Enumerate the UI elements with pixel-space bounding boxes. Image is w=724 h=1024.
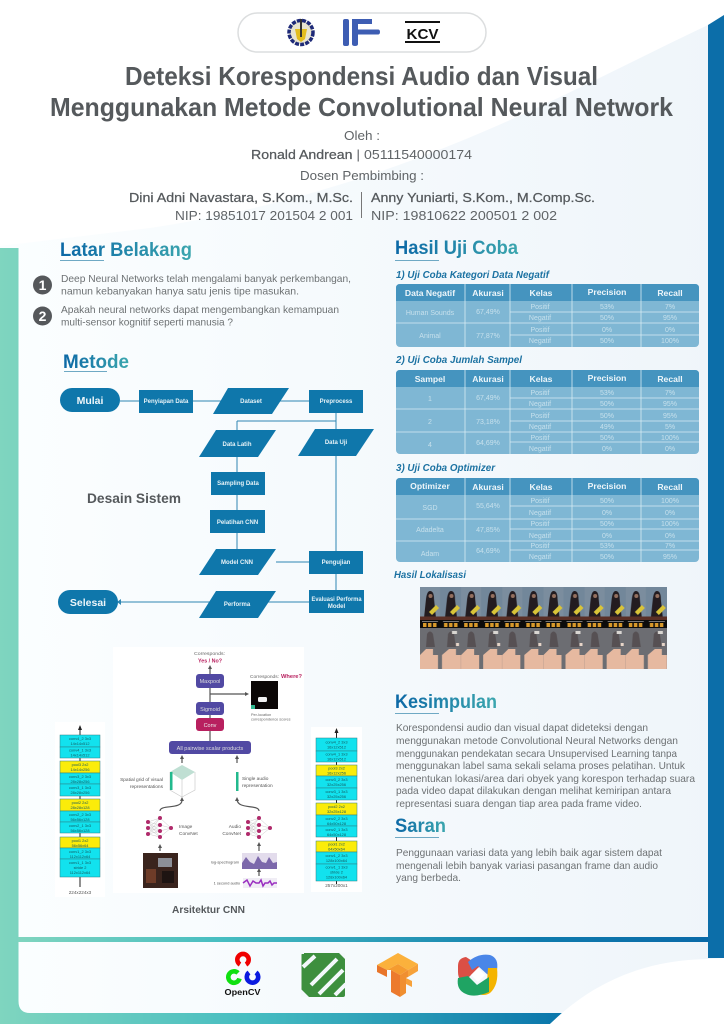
authors and supervisors: Oleh : (344, 128, 380, 143)
right VGG stack: 257x200x1 (325, 883, 348, 888)
paragraph: mengenali lebih banyak variasi pasangan frame dan audio (396, 861, 658, 872)
authors and supervisors: Dini Adni Navastara, S.Kom., M.Sc. (129, 190, 353, 205)
left VGG stack: 56x56x64 (72, 843, 89, 848)
right VGG stack: 16x12x512 (327, 756, 346, 762)
subheading 2: 2) Uji Coba Jumlah Sampel (395, 355, 522, 366)
paragraph: representasi suara dengan tiap area pada frame video. (396, 799, 642, 810)
table 1: Animal (419, 333, 441, 340)
table 2: 2 (428, 419, 432, 426)
table 2: 1 (428, 396, 432, 403)
audio convnet: ConvNet (222, 831, 242, 837)
table 1: Kelas (530, 288, 553, 298)
left VGG stack: conv2_2 3x3 (69, 812, 91, 817)
table 1 (396, 284, 699, 347)
table 3: Negatif (529, 554, 551, 561)
icon: TensorFlow (377, 953, 418, 997)
left VGG stack: 28x28x256 (70, 779, 90, 784)
Sigmoid (196, 702, 224, 715)
table 2 (396, 370, 699, 454)
table 1: 67,49% (476, 309, 500, 316)
table 1: 100% (661, 338, 679, 345)
left VGG stack: 14x14x512 (70, 752, 90, 758)
node: Evaluasi Performa Model: Evaluasi Performa (312, 597, 362, 603)
table 2: Positif (530, 390, 550, 397)
node: Evaluasi Performa Model (309, 590, 364, 613)
right VGG stack: conv4_2 3x3 (325, 740, 348, 744)
Maxpool: Maxpool (200, 679, 220, 685)
table 3: 50% (600, 554, 614, 561)
table 1: Negatif (529, 315, 551, 322)
node: Preprocess: Preprocess (320, 399, 353, 405)
node: Sampling Data: Sampling Data (217, 481, 259, 487)
icon: FFmpeg (300, 952, 346, 997)
table 2: Negatif (529, 446, 551, 453)
node: Sampling Data (211, 472, 265, 495)
table 1: 0% (602, 327, 612, 334)
visual representation cube (120, 765, 195, 797)
arrowhead to Selesai (117, 599, 121, 605)
right VGG stack: 16x12x512 (327, 744, 346, 750)
table 2: Negatif (529, 401, 551, 408)
table 2: 5% (665, 424, 675, 431)
table 2: 95% (663, 413, 677, 420)
logo pill (238, 13, 486, 52)
node: Penyiapan Data (139, 390, 193, 413)
left VGG stack: 112x112x64 (70, 870, 91, 875)
icon: OpenCV (224, 954, 261, 997)
left VGG stack: 14x14x512 (70, 741, 90, 746)
correspondence map: correspondence scores (251, 718, 291, 722)
right VGG stack: 64x50x128 (327, 832, 346, 837)
table 2: 64,69% (476, 440, 500, 447)
table 3: Precision (588, 481, 626, 491)
right VGG stack: 64x50x64 (328, 846, 346, 852)
correspondence map (250, 674, 302, 722)
node: Performa (199, 591, 276, 618)
table 3: 0% (602, 533, 612, 540)
point 1: Deep Neural Networks telah mengalami banyak perkembangan, (61, 274, 351, 285)
table 1: 7% (665, 304, 675, 311)
point 1 (33, 274, 351, 298)
All pairwise scalar products (169, 741, 251, 754)
table 1: Precision (588, 287, 626, 297)
left VGG stack: conv1_1 3x3 (69, 860, 91, 865)
paragraph: pada video dapat dilakukan dengan melihat kemiripan antara (396, 786, 671, 797)
right VGG stack: conv3_1 3x3 (325, 789, 348, 794)
correspondence map: Per-location (251, 713, 271, 717)
left VGG stack: 28x28x128 (70, 805, 90, 810)
node: Mulai (60, 388, 120, 412)
audio waveform (214, 878, 277, 888)
audio convnet (222, 816, 272, 839)
table 3: 0% (602, 510, 612, 517)
table 3: 0% (665, 510, 675, 517)
left VGG stack: pool3 2x2 (72, 762, 88, 767)
paragraph: Penggunaan variasi data yang lebih baik agar sistem dapat (396, 848, 662, 859)
table 2: Akurasi (472, 374, 504, 384)
left VGG stack: 56x56x128 (70, 817, 90, 822)
authors and supervisors: NIP: 19851017 201504 2 001 (175, 208, 353, 223)
table 3 (396, 478, 699, 562)
node: Penyiapan Data: Penyiapan Data (144, 399, 189, 405)
right VGG stack: conv2_2 3x3 (325, 816, 348, 821)
icon: ITS emblem (289, 19, 313, 44)
heading: Hasil Uji Coba (395, 238, 518, 259)
left VGG stack: conv3_2 3x3 (69, 774, 91, 779)
panel: Kesimpulan (395, 692, 695, 810)
heading: Kesimpulan (395, 692, 497, 713)
output label: Yes / No? (198, 658, 222, 664)
table 3: 55,64% (476, 503, 500, 510)
table 2: 53% (600, 390, 614, 397)
table 1: 50% (600, 338, 614, 345)
panel: Hasil Uji Coba (394, 238, 699, 669)
right VGG stack: 32x25x256 (327, 782, 346, 787)
table 3: Adadelta (416, 527, 444, 534)
table 2: 95% (663, 401, 677, 408)
log-spectrogram: log-spectrogram (211, 860, 239, 864)
heading: Saran (395, 816, 446, 837)
visual representation cube: Spatial grid of visual (120, 777, 163, 783)
table 2: Positif (530, 413, 550, 420)
audio representation bar: Single audio (242, 776, 269, 782)
table 2: Negatif (529, 424, 551, 431)
table 3: 0% (665, 533, 675, 540)
right VGG stack: conv1_2 3x3 (325, 853, 348, 858)
table 3: 47,85% (476, 527, 500, 534)
right VGG stack (311, 727, 362, 892)
audio representation bar (236, 772, 273, 791)
output label: Corresponds: (194, 651, 225, 656)
left VGG stack: 112x112x64 (70, 854, 91, 859)
Sigmoid: Sigmoid (200, 707, 220, 713)
table 3: Optimizer (410, 481, 450, 491)
right VGG stack: conv3_2 3x3 (325, 777, 348, 782)
table 1: Positif (530, 327, 550, 334)
table 3: 53% (600, 543, 614, 550)
node: Pengujian: Pengujian (322, 560, 351, 566)
paragraph: Korespondensi audio dan visual dapat dideteksi dengan (396, 723, 648, 734)
node: Selesai (58, 590, 118, 614)
right VGG stack: stride 2 (330, 870, 343, 874)
table 2: 100% (661, 435, 679, 442)
left VGG stack: pool2 2x2 (72, 800, 88, 805)
table 1: 53% (600, 304, 614, 311)
left VGG stack: 28x28x256 (70, 790, 90, 795)
audio representation bar: representation (242, 783, 273, 789)
table 1: Positif (530, 304, 550, 311)
right VGG stack: 32x25x128 (327, 809, 346, 814)
point 1: 1 (39, 277, 47, 293)
icon: KCV logo: KCV (406, 26, 438, 43)
node: Performa: Performa (224, 602, 251, 608)
table 3: Recall (657, 482, 683, 492)
paragraph (396, 723, 695, 810)
image convnet: ConvNet (179, 831, 198, 837)
Conv: Conv (204, 723, 217, 729)
table 3: Adam (421, 551, 439, 558)
node: Pengujian (309, 551, 363, 574)
table 2: 50% (600, 401, 614, 408)
authors and supervisors: Ronald Andrean | 05111540000174 (251, 147, 472, 162)
right VGG stack: 32x25x256 (327, 794, 346, 799)
table 3: Positif (530, 521, 550, 528)
node: Data Latih: Data Latih (222, 442, 252, 448)
heading: Latar Belakang (60, 240, 192, 261)
visual representation cube: representations (130, 784, 164, 790)
table 1: Negatif (529, 338, 551, 345)
right VGG stack: 128x100x64 (326, 874, 348, 880)
left VGG stack: conv1_2 3x3 (69, 849, 91, 854)
node: Preprocess (309, 390, 363, 413)
table 3: SGD (422, 505, 438, 512)
left VGG stack: stride 2 (74, 865, 86, 870)
node: Dataset: Dataset (240, 399, 262, 405)
node: Pelatihan CNN: Pelatihan CNN (217, 520, 258, 526)
subheading: Hasil Lokalisasi: Hasil Lokalisasi (394, 570, 466, 581)
left VGG stack (55, 722, 105, 897)
output label (194, 651, 225, 664)
left VGG stack: conv4_1 3x3 (69, 748, 91, 752)
table 1: 0% (665, 327, 675, 334)
localisation result frames (420, 587, 667, 669)
table 2: 50% (600, 435, 614, 442)
paragraph: menentukan lokasi/area dari obyek yang korespon terhadap suara (396, 774, 695, 785)
node: Pelatihan CNN (210, 510, 265, 533)
right VGG stack: 128x100x64 (326, 858, 348, 863)
node: Data Uji: Data Uji (325, 440, 348, 446)
table 1: 95% (663, 315, 677, 322)
node: Model CNN: Model CNN (221, 560, 253, 566)
table 2: 0% (665, 446, 675, 453)
image convnet: Image (179, 824, 193, 830)
right VGG stack: pool1 2x2 (328, 842, 345, 846)
table 3: 7% (665, 543, 675, 550)
icon: OpenCV: OpenCV (224, 987, 261, 997)
left VGG stack: conv4_2 3x3 (69, 736, 91, 741)
title: Deteksi Korespondensi Audio dan Visual (125, 61, 598, 91)
table 2: Positif (530, 435, 550, 442)
left VGG stack: 224x224x3 (69, 890, 92, 895)
heading: Metode: Metode (63, 352, 129, 373)
flowchart: Desain Sistem (58, 388, 374, 618)
table 3: Kelas (530, 482, 553, 492)
table 2: 73,18% (476, 419, 500, 426)
panel: Latar Belakang (33, 240, 351, 328)
node: Mulai: Mulai (77, 395, 103, 407)
right VGG stack: conv1_1 3x3 (325, 864, 348, 870)
table 1: Akurasi (472, 288, 504, 298)
paragraph: yang berbeda. (396, 873, 461, 884)
table 3: Negatif (529, 533, 551, 540)
table 1: 50% (600, 315, 614, 322)
icon: KCV logo (405, 21, 440, 43)
right VGG stack: 64x50x128 (327, 821, 346, 826)
footer logos (224, 952, 497, 997)
table 2: 0% (602, 446, 612, 453)
node: Evaluasi Performa Model: Model (328, 604, 345, 610)
table 3: 100% (661, 498, 679, 505)
table 3: 50% (600, 521, 614, 528)
paragraph: menggunakan metode Convolutional Neural Networks dengan (396, 736, 678, 747)
left VGG stack: conv3_1 3x3 (69, 785, 91, 790)
audio waveform: 1 second audio (214, 880, 240, 886)
left VGG stack: 56x56x128 (70, 828, 90, 833)
point 2 (33, 305, 339, 328)
title (50, 61, 674, 122)
table 1: 77,87% (476, 333, 500, 340)
table 2: Recall (657, 374, 683, 384)
paragraph (396, 848, 662, 884)
Maxpool (196, 674, 224, 688)
table 2: 4 (428, 442, 432, 449)
table 2: Precision (588, 373, 626, 383)
image convnet (146, 816, 198, 839)
table 2: Kelas (530, 374, 553, 384)
audio convnet: Audio (229, 824, 241, 830)
table 3: Positif (530, 543, 550, 550)
center diagram (113, 647, 304, 893)
left VGG stack: 14x14x256 (70, 767, 90, 772)
left VGG stack: conv2_1 3x3 (69, 823, 91, 828)
table 3: 50% (600, 498, 614, 505)
node: Dataset (213, 388, 289, 414)
table 3: 95% (663, 554, 677, 561)
correspondence map: Where? (281, 674, 302, 680)
input video frame (143, 853, 178, 888)
table 2: Sampel (415, 374, 445, 384)
panel: CNN architecture (55, 647, 362, 916)
table 1: Data Negatif (405, 288, 455, 298)
authors and supervisors (129, 128, 595, 223)
table 3: Positif (530, 498, 550, 505)
paragraph: menggunakan label sama sekali selama proses pelatihan. Untuk (396, 761, 686, 772)
point 1: namun kebanyakan hanya satu jenis tipe masukan. (61, 286, 299, 298)
label: Desain Sistem: Desain Sistem (87, 490, 181, 506)
right VGG stack: pool3 2x2 (328, 766, 345, 770)
table 3: 64,69% (476, 548, 500, 555)
right VGG stack: pool2 2x2 (328, 804, 345, 809)
table 2: 49% (600, 424, 614, 431)
right VGG stack: conv4_1 3x3 (325, 752, 348, 756)
paragraph: menggunakan pendekatan secara Unsupervised Learning tanpa (396, 749, 677, 760)
caption: Arsitektur CNN: Arsitektur CNN (172, 904, 245, 916)
node: Data Uji (298, 429, 374, 456)
table 1: Recall (657, 288, 683, 298)
node: Selesai: Selesai (70, 597, 106, 609)
authors and supervisors: Anny Yuniarti, S.Kom., M.Comp.Sc. (371, 190, 595, 205)
node: Model CNN (199, 549, 276, 575)
subheading 3: 3) Uji Coba Optimizer (396, 463, 496, 474)
right VGG stack: conv2_1 3x3 (325, 827, 348, 832)
table 2: 50% (600, 413, 614, 420)
table 3: Akurasi (472, 482, 504, 492)
point 2: Apakah neural networks dapat mengembangkan kemampuan (61, 305, 339, 316)
point 2: multi-sensor kognitif seperti manusia ? (61, 318, 233, 328)
correspondence map: Corresponds: (250, 674, 279, 679)
table 3: 100% (661, 521, 679, 528)
title: Menggunakan Metode Convolutional Neural Network (50, 92, 674, 122)
node: Data Latih (199, 430, 276, 457)
point 2: 2 (39, 308, 47, 324)
subheading 1: 1) Uji Coba Kategori Data Negatif (396, 270, 551, 281)
left VGG stack: pool1 2x2 (72, 838, 88, 843)
Conv (196, 718, 224, 731)
panel: Saran (395, 816, 662, 884)
icon: Google Colab style knot (458, 955, 497, 996)
All pairwise scalar products: All pairwise scalar products (177, 746, 244, 752)
authors and supervisors: NIP: 19810622 200501 2 002 (371, 208, 557, 223)
table 2: 7% (665, 390, 675, 397)
right VGG stack: 16x12x256 (327, 770, 346, 776)
table 1: Human Sounds (406, 310, 455, 317)
table 3: Negatif (529, 510, 551, 517)
authors and supervisors: Dosen Pembimbing : (300, 168, 424, 183)
icon: IF logo (343, 19, 380, 46)
log-spectrogram (211, 853, 277, 869)
table 2: 67,49% (476, 395, 500, 402)
